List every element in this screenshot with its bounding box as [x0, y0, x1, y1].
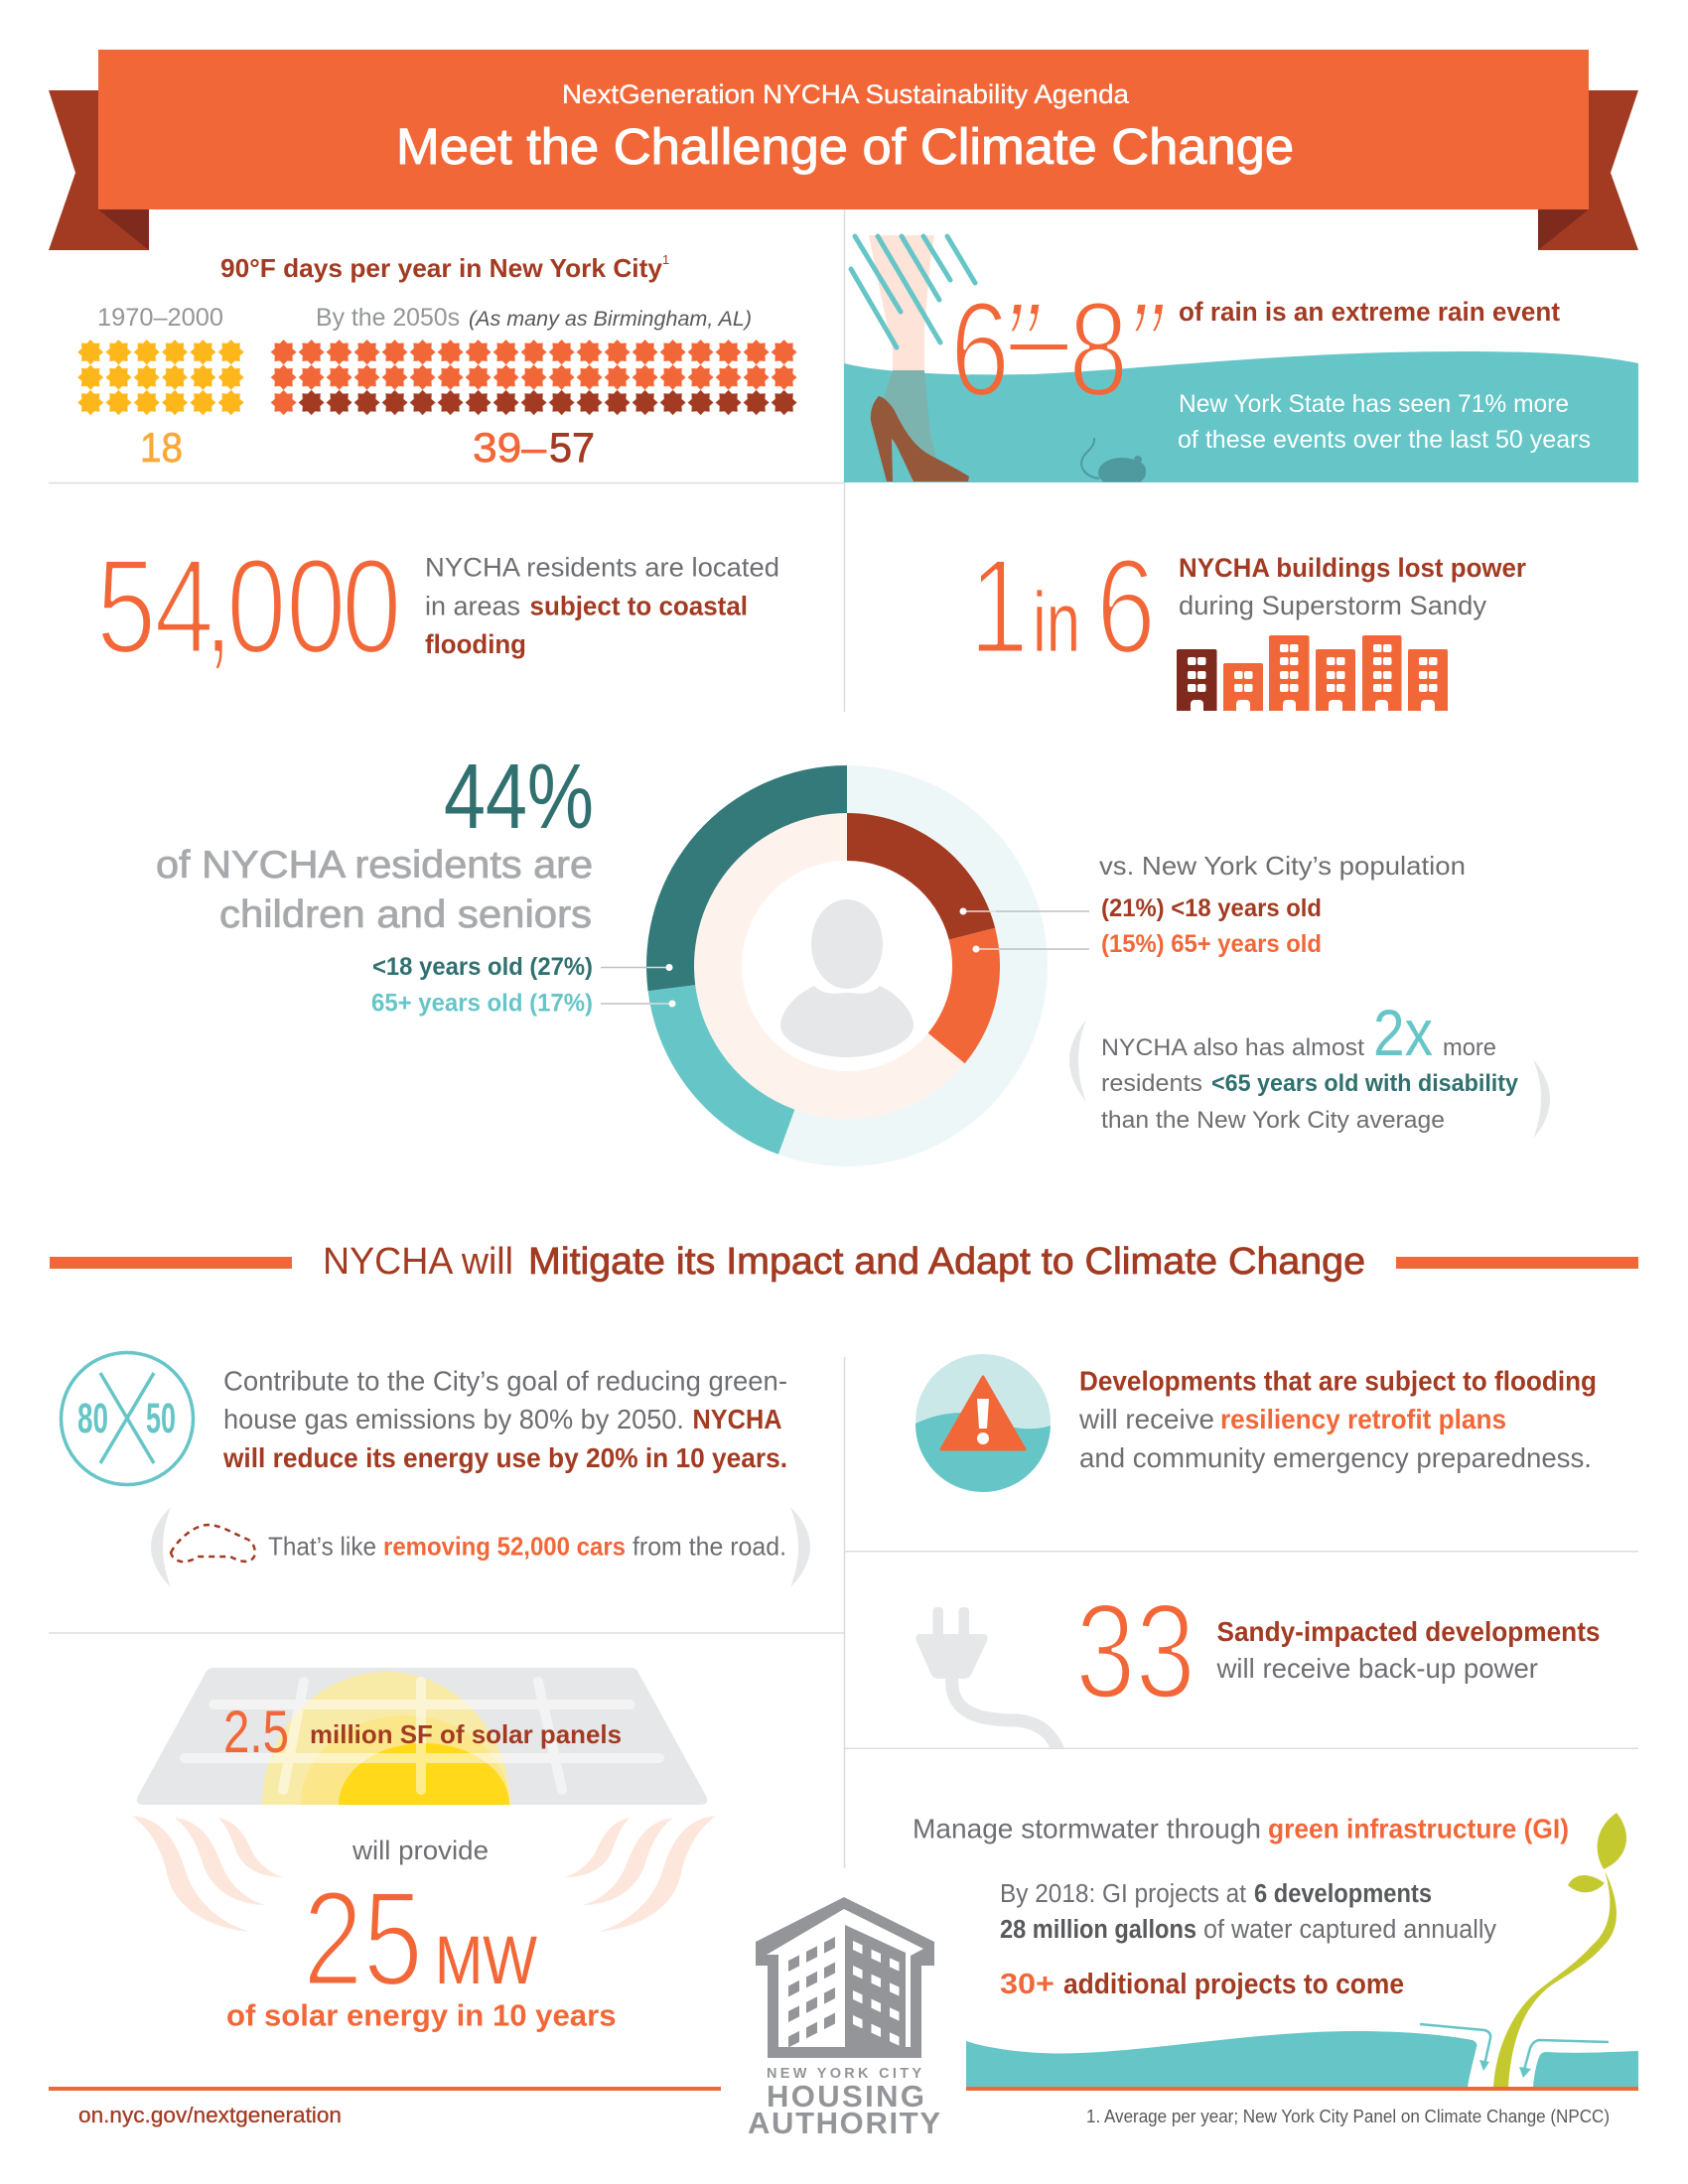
text: million SF: million SF of solar panels: [310, 1719, 622, 1749]
section heading: NYCHA will: [323, 1241, 513, 1283]
icon: person: [780, 899, 914, 1057]
number: 2x: 2x: [1373, 996, 1433, 1069]
icon: 80x50 badge: [62, 1352, 193, 1485]
heading: 90F days: 90°F days per year in New York City: [220, 253, 663, 283]
text: energy goal: NYCHA: [693, 1404, 782, 1434]
panel: 90F days: [76, 252, 798, 471]
text: solar energy: of solar energy in 10 years: [226, 1997, 616, 2033]
bracket left: [151, 1507, 171, 1587]
title: Meet the Challenge of Climate Change: [396, 118, 1294, 175]
text: back-up power: will receive back-up power: [1215, 1653, 1538, 1684]
text: residents: residents: [1101, 1070, 1202, 1097]
icon: dashed car: [171, 1525, 255, 1562]
subtitle: NextGeneration NYCHA Sustainability Agenda: [562, 79, 1129, 109]
inner ring background: [718, 837, 976, 1095]
text: by 2018: 28 million gallons: [1000, 1916, 1196, 1944]
panel: 1 in 6: [969, 530, 1526, 711]
number: 54,000: 54,000: [96, 532, 402, 682]
text: disability: <65 years old with disability: [1211, 1070, 1518, 1097]
text: energy goal: house gas emissions by 80% by 2050.: [223, 1404, 684, 1434]
label: under 18 NYC: (21%) <18 years old: [1101, 894, 1322, 922]
number: 39-57: 39–: [473, 424, 547, 471]
text: more: more: [1443, 1034, 1496, 1061]
panel: back-up power: [915, 1605, 1599, 1748]
text: during Sandy: during Superstorm Sandy: [1179, 591, 1487, 620]
section heading: [50, 1241, 1638, 1283]
callout: disability: [1069, 996, 1550, 1139]
text: coastal flooding: in areas: [425, 592, 520, 621]
logo: housing authority: [748, 1897, 940, 2140]
icon: 80x50 badge: 50: [146, 1395, 176, 1442]
label: under 18 NYCHA: <18 years old (27%): [372, 953, 593, 981]
text: extreme rain: of rain is an extreme rain event: [1179, 297, 1560, 327]
number: 39-57: 57: [549, 424, 595, 471]
bracket right: [790, 1507, 810, 1587]
arrow: right runoff: [1519, 2040, 1609, 2078]
segment: NYC under 18: [847, 813, 995, 940]
footer: url: [49, 2087, 721, 2127]
text: by 2018: By 2018: GI projects at: [1000, 1880, 1246, 1908]
label: Birmingham: (As many as Birmingham, AL): [469, 308, 752, 331]
text: from the road: from the road.: [633, 1531, 786, 1561]
icons: 18 yellow stars: [76, 340, 245, 415]
number: 1 in 6: [969, 530, 1156, 681]
text: lost power: NYCHA buildings lost power: [1179, 553, 1526, 583]
outer ring background: [670, 789, 1024, 1143]
text: housing: HOUSING: [767, 2079, 924, 2114]
text: energy goal: Contribute to the City’s goal of reducing green-: [223, 1366, 787, 1396]
number: 44 percent: 44%: [444, 745, 594, 848]
leader lines: [601, 911, 1089, 1004]
text: green infrastructure: green infrastructure (GI): [1268, 1813, 1569, 1844]
number: 2.5: 2.5: [223, 1699, 289, 1765]
text: flooding: resiliency retrofit plans: [1220, 1404, 1506, 1434]
ground water: [966, 2031, 1638, 2087]
arrow: left runoff: [1420, 2024, 1490, 2071]
number: 18: 18: [140, 424, 183, 471]
number: 39-57: [473, 424, 595, 471]
number: 1 in 6: in: [1033, 576, 1080, 670]
text: by 2018: [1000, 1880, 1496, 1944]
text: vs NYC: vs. New York City’s population: [1099, 851, 1466, 881]
bracket left: [1069, 1020, 1086, 1102]
text: 30+ projects: 30+: [1000, 1969, 1055, 2000]
text: by 2018: of water captured annually: [1203, 1916, 1496, 1944]
icon: building: [756, 1897, 934, 2058]
text: almost: NYCHA also has almost: [1101, 1034, 1364, 1061]
icon: mouse: [1081, 438, 1146, 487]
title banner: [49, 50, 1638, 250]
text: 30+ projects: additional projects to come: [1063, 1969, 1404, 2000]
panel: 80 x 50: [62, 1352, 810, 1587]
text: will provide: will provide: [352, 1836, 489, 1865]
donut chart: [646, 765, 1024, 1155]
text: new york city: NEW YORK CITY: [767, 2066, 921, 2082]
label: 65 plus NYCHA: 65+ years old (17%): [371, 989, 593, 1017]
icon: buildings: [1177, 635, 1448, 711]
text: coastal flooding: flooding: [425, 629, 526, 659]
section dividers: [49, 209, 1638, 1868]
section heading: Mitigate its Impact and Adapt to Climate Change: [528, 1241, 1365, 1283]
text: coastal flooding: [425, 552, 779, 659]
label: 1970-2000: 1970–2000: [97, 304, 223, 332]
text: energy goal: will reduce its energy use by 20% in 10 years.: [222, 1442, 787, 1473]
leg above water: [869, 235, 934, 370]
number: 1 in 6: 1: [969, 530, 1029, 681]
icon: high heel shoe: [871, 396, 969, 481]
segment: NYC 65 plus: [928, 928, 1000, 1063]
panel: 54,000 residents: [96, 532, 779, 682]
icon: rain: [851, 236, 975, 347]
icon: flood warning: [915, 1354, 1051, 1492]
panel: extreme rain: [844, 235, 1638, 487]
segment: NYCHA under 18: [646, 765, 847, 991]
text: Sandy impacted: Sandy-impacted developments: [1217, 1616, 1601, 1647]
text: flooding: and community emergency preparedness.: [1079, 1442, 1592, 1473]
icon: plug: [915, 1607, 1059, 1753]
text: 71 percent line 2: of these events over the last 50 years: [1178, 426, 1591, 454]
footer: url: on.nyc.gov/nextgeneration: [78, 2103, 342, 2127]
panel: solar: [132, 1668, 716, 2033]
segment: NYCHA 65 plus: [648, 985, 794, 1155]
footnote: 1. Average per year; New York City Panel on Climate Change (NPCC): [1086, 2106, 1610, 2126]
icon: heat waves: [132, 1816, 716, 1932]
callout: cars: [151, 1507, 810, 1587]
footer rule: [966, 2087, 1638, 2091]
icon: solar panel and sun: [137, 1668, 707, 1805]
text: 71 percent line 1: New York State has seen 71% more: [1179, 390, 1569, 418]
heading: children and seniors line 2: children and seniors: [219, 893, 592, 936]
text: flooding: [1078, 1366, 1597, 1473]
text: average: than the New York City average: [1101, 1107, 1445, 1134]
text: authority: AUTHORITY: [748, 2106, 940, 2140]
footnote mark: 1: [662, 252, 669, 267]
text: by 2018: 6 developments: [1254, 1880, 1432, 1908]
text: flooding: will receive: [1078, 1404, 1214, 1434]
text: flooding: Developments that are subject to flooding: [1079, 1366, 1597, 1396]
panel: green infrastructure: [913, 1813, 1638, 2091]
water: [844, 351, 1638, 482]
panel: flooding: [915, 1354, 1597, 1492]
text: like: That’s like: [268, 1531, 376, 1561]
label: 65 plus NYC: (15%) 65+ years old: [1101, 930, 1322, 958]
panel: demographics: [156, 745, 1550, 1155]
text: manage stormwater: Manage stormwater through: [913, 1813, 1261, 1844]
number: 25: 25: [303, 1862, 423, 2013]
icon: 80x50 badge: 80: [77, 1395, 108, 1442]
number unit: MW: MW: [435, 1922, 537, 1998]
icons: 57 orange and dark stars: [270, 340, 798, 415]
number: 6-8 inches: 6”–8”: [950, 261, 1165, 425]
text: removing cars: removing 52,000 cars: [383, 1531, 626, 1561]
number: 1 in 6: 6: [1096, 530, 1156, 681]
number: 33: 33: [1075, 1575, 1196, 1726]
bracket right: [1533, 1059, 1550, 1139]
icon: plant: [1493, 1813, 1626, 2087]
text: coastal flooding: NYCHA residents are located: [425, 552, 779, 582]
label: by the 2050s: By the 2050s: [316, 304, 460, 332]
heading: children and seniors line 1: of NYCHA residents are: [156, 844, 593, 887]
text: coastal flooding: subject to coastal: [530, 592, 748, 621]
leader dots: [665, 907, 979, 1007]
text: energy goal: [222, 1366, 787, 1473]
leg under water: [884, 370, 936, 459]
